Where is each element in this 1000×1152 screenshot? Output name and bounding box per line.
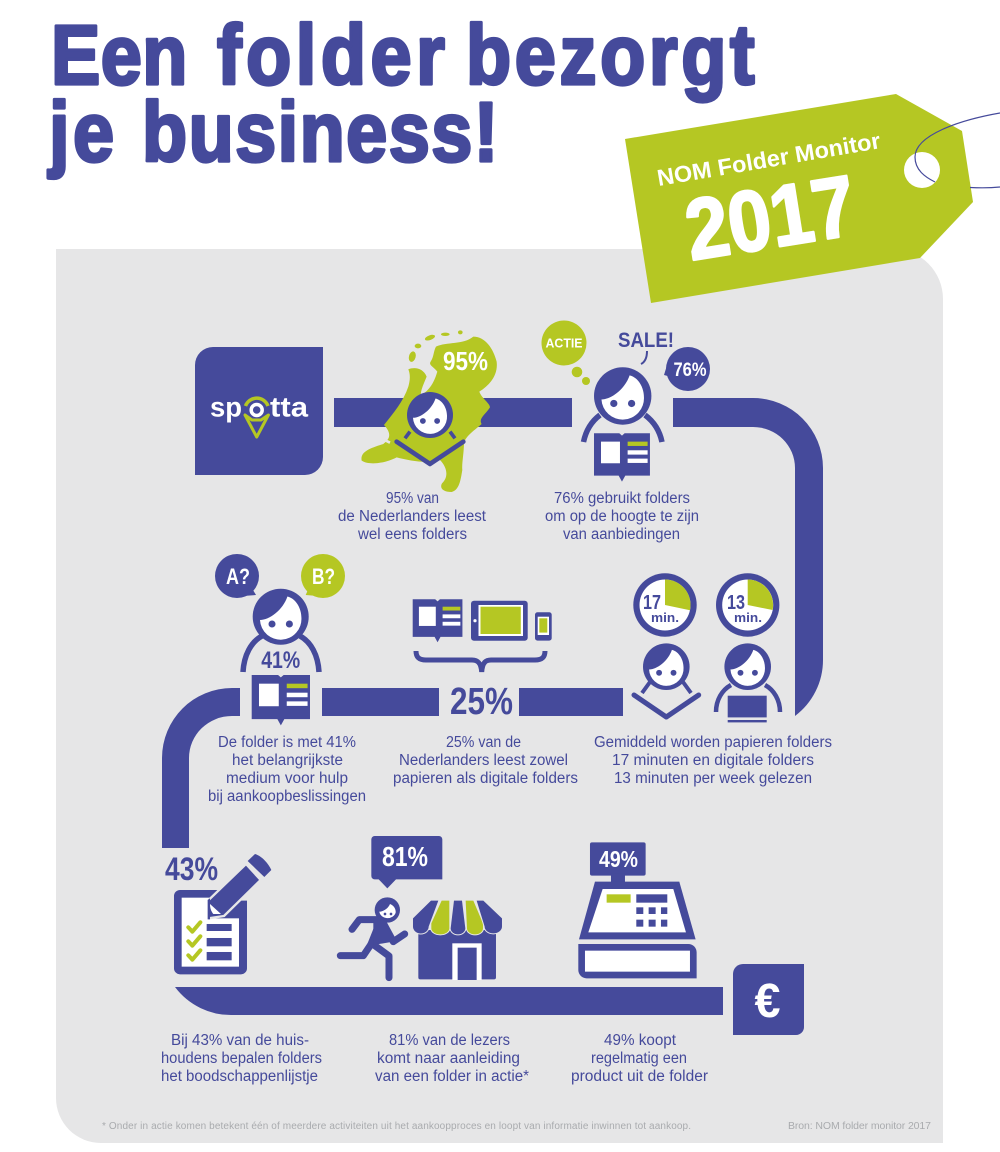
icon: person at laptop (716, 643, 780, 722)
price tag: NOM Folder Monitor 2017: NOM Folder Monitor (655, 127, 882, 191)
icon: cash register 49% (578, 842, 697, 978)
text: 76%: 76% gebruikt folders (554, 490, 690, 507)
text: 49%: regelmatig een (591, 1050, 687, 1067)
map: Netherlands 95%: 95% (443, 346, 488, 376)
text: 43% (161, 1032, 322, 1085)
text: reading time: 13 minuten per week gelezen (614, 770, 812, 787)
title: bezorgt (466, 8, 755, 102)
text: 76%: van aanbiedingen (563, 526, 680, 543)
text: 43%: houdens bepalen folders (161, 1050, 322, 1067)
icon: folder, tablet and phone 25% (413, 599, 552, 723)
icon: shopping list with pencil 43% (165, 851, 271, 974)
logo: spotta: tta (270, 392, 308, 422)
text: 81%: komt naar aanleiding (377, 1050, 520, 1067)
title (47, 8, 755, 179)
text: 25% (393, 734, 578, 787)
source: Bron: NOM folder monitor 2017 (788, 1120, 931, 1132)
icon: person 41% with A/B: A? (226, 564, 250, 589)
text: 41% (208, 734, 366, 805)
text: 95%: de Nederlanders leest (338, 508, 487, 525)
title: Een (51, 8, 187, 102)
icon: reader 76% with sale: ACTIE (546, 336, 582, 350)
text: 41%: medium voor hulp (226, 770, 348, 787)
icon: clock 13 min (716, 573, 779, 637)
icon: runner to shop 81%: 81% (382, 841, 428, 872)
icon: person 41% with A/B: 41% (261, 647, 300, 674)
icon: reader 76% with sale (542, 320, 710, 482)
icon: euro: € (754, 975, 780, 1028)
text: 81%: 81% van de lezers (389, 1032, 510, 1049)
footnote: * Onder in actie komen betekent één of meerdere activiteiten uit het aankoopproces en loopt van informatie inwinnen tot aankoop. (102, 1121, 691, 1132)
title: je (47, 85, 114, 179)
text: 95%: 95% van (386, 490, 439, 507)
logo: spotta (195, 347, 323, 475)
icon: runner to shop 81% (340, 836, 502, 980)
icon: shopping list with pencil 43%: 43% (165, 851, 218, 887)
text: 81% (375, 1032, 529, 1085)
icon: euro (733, 964, 804, 1035)
text: 25%: 25% van de (446, 734, 521, 751)
flow path (162, 398, 823, 1015)
text: 95%: wel eens folders (357, 526, 467, 543)
text: reading time: 17 minuten en digitale folders (612, 752, 814, 769)
text: 41%: De folder is met 41% (218, 734, 356, 751)
icon: person reading paper folder (634, 643, 699, 717)
text: 95% (338, 490, 487, 543)
text: reading time: Gemiddeld worden papieren folders (594, 734, 832, 751)
icon: clock 17 min (633, 573, 697, 637)
text: 41%: bij aankoopbeslissingen (208, 788, 366, 805)
icon: clock 17 min: min. (651, 610, 679, 625)
title: business! (142, 85, 498, 179)
icon: clock 13 min: min. (734, 610, 762, 625)
panel: grey background (56, 249, 943, 1143)
icon: person 41% with A/B: B? (312, 564, 335, 589)
icon: cash register 49%: 49% (599, 846, 638, 872)
title: folder (217, 8, 445, 102)
text: 76%: om op de hoogte te zijn (545, 508, 699, 525)
text: 43%: het boodschappenlijstje (161, 1068, 318, 1085)
text: 41%: het belangrijkste (232, 752, 343, 769)
icon: reader 76% with sale: 76% (674, 360, 707, 381)
icon: folder, tablet and phone 25%: 25% (450, 681, 513, 723)
text: 49%: 49% koopt (604, 1032, 677, 1049)
text: 49% (571, 1032, 708, 1085)
text: 43%: Bij 43% van de huis- (171, 1032, 309, 1049)
text: 81%: van een folder in actie* (375, 1068, 529, 1085)
logo: spotta: sp (210, 392, 242, 422)
text: reading time (594, 734, 832, 787)
text: 25%: Nederlanders leest zowel (399, 752, 568, 769)
icon: clock 17 min: 17 (643, 592, 661, 614)
icon: clock 13 min: 13 (727, 592, 745, 614)
price tag: NOM Folder Monitor 2017 (625, 94, 1000, 303)
text: 76% (545, 490, 699, 543)
map: Netherlands 95% (361, 330, 497, 492)
icon: person 41% with A/B (215, 554, 345, 725)
price tag: NOM Folder Monitor 2017: 2017 (679, 158, 862, 279)
text: 49%: product uit de folder (571, 1068, 708, 1085)
icon: reader 76% with sale: SALE! (618, 329, 674, 352)
text: 25%: papieren als digitale folders (393, 770, 578, 787)
